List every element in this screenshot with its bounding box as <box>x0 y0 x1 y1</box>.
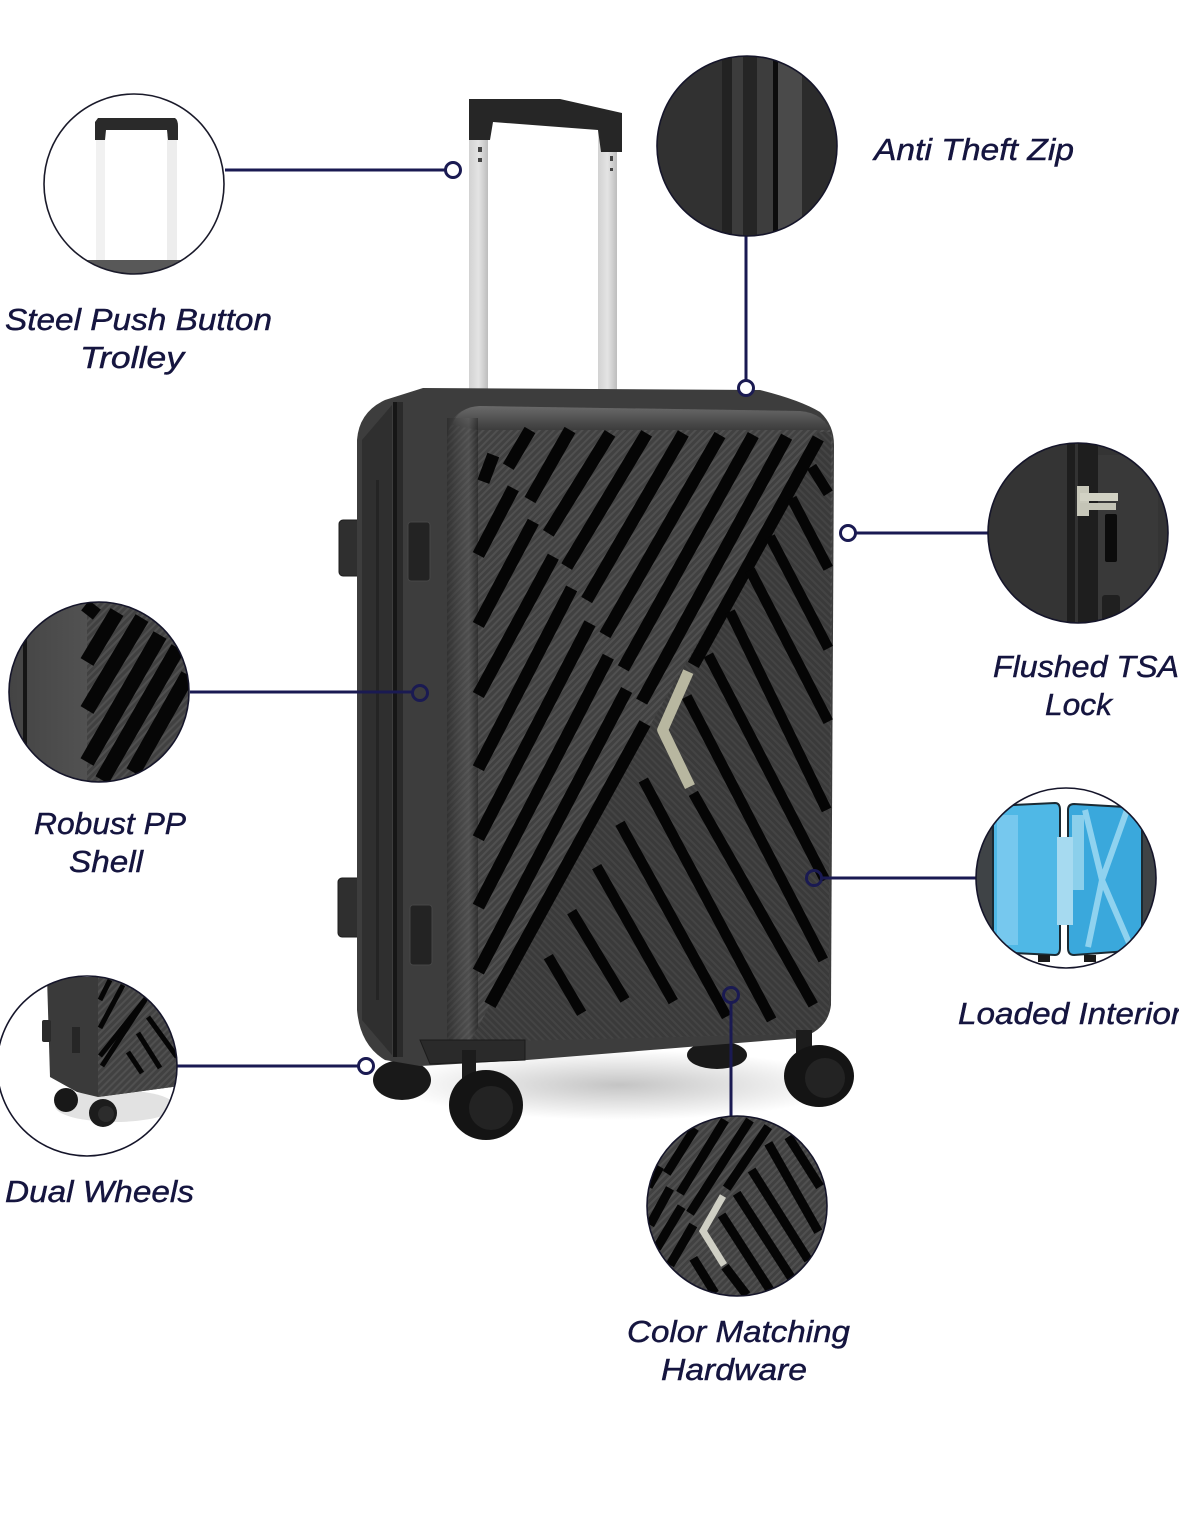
callout: Flushed TSA Lock <box>840 440 1179 722</box>
detail circle: zip <box>657 50 840 240</box>
logo chevron <box>663 672 690 787</box>
connector line <box>177 1058 374 1074</box>
detail circle: hardware <box>647 1116 827 1296</box>
callout: Steel Push Button Trolley <box>5 94 460 375</box>
top rim highlight <box>452 406 830 430</box>
callout: Color Matching Hardware <box>627 988 850 1387</box>
label: Dual Wheels <box>5 1174 194 1209</box>
label: Hardware <box>661 1352 807 1387</box>
detail circle: wheels <box>0 976 180 1156</box>
carbon edge strip <box>447 418 478 1045</box>
label: Loaded Interior <box>958 996 1179 1031</box>
connector line <box>806 870 977 886</box>
label: Shell <box>69 844 144 879</box>
front left wheel <box>449 1050 523 1140</box>
label: Trolley <box>80 340 187 375</box>
bottom bumper <box>420 1040 525 1064</box>
connector line <box>724 988 738 1116</box>
label: Steel Push Button <box>5 302 272 337</box>
suitcase product photo <box>338 99 854 1140</box>
label <box>34 806 186 879</box>
telescopic trolley handle <box>469 99 622 392</box>
callout: Loaded Interior <box>806 788 1179 1031</box>
callout: Robust PP Shell <box>9 600 428 879</box>
connector line <box>840 526 988 540</box>
label <box>627 1314 850 1387</box>
label <box>5 302 272 375</box>
connector line <box>738 235 754 396</box>
diagonal black stripes <box>478 430 828 1020</box>
connector line <box>190 686 428 700</box>
callout: Anti Theft Zip <box>657 50 1074 396</box>
detail circle: interior <box>976 788 1158 968</box>
label: Color Matching <box>627 1314 850 1349</box>
suitcase front grips <box>408 522 432 965</box>
rear wheels <box>373 1041 747 1100</box>
label: Anti Theft Zip <box>872 132 1074 167</box>
callout: Dual Wheels <box>0 976 374 1209</box>
suitcase side grips <box>338 520 363 937</box>
front face panel <box>447 406 833 1046</box>
floor shadow <box>395 1050 845 1120</box>
label <box>993 649 1179 722</box>
front right wheel <box>784 1030 854 1107</box>
label: Robust PP <box>34 806 186 841</box>
suitcase shell body <box>357 388 834 1066</box>
shell vertical seams <box>362 402 403 1057</box>
connector line <box>225 162 460 178</box>
label: Flushed TSA <box>993 649 1179 684</box>
label: Lock <box>1045 687 1114 722</box>
detail circle: shell <box>9 600 197 790</box>
lower right texture panel <box>470 432 831 1042</box>
detail circle: TSA lock <box>988 440 1168 630</box>
detail circle: trolley <box>40 94 230 280</box>
